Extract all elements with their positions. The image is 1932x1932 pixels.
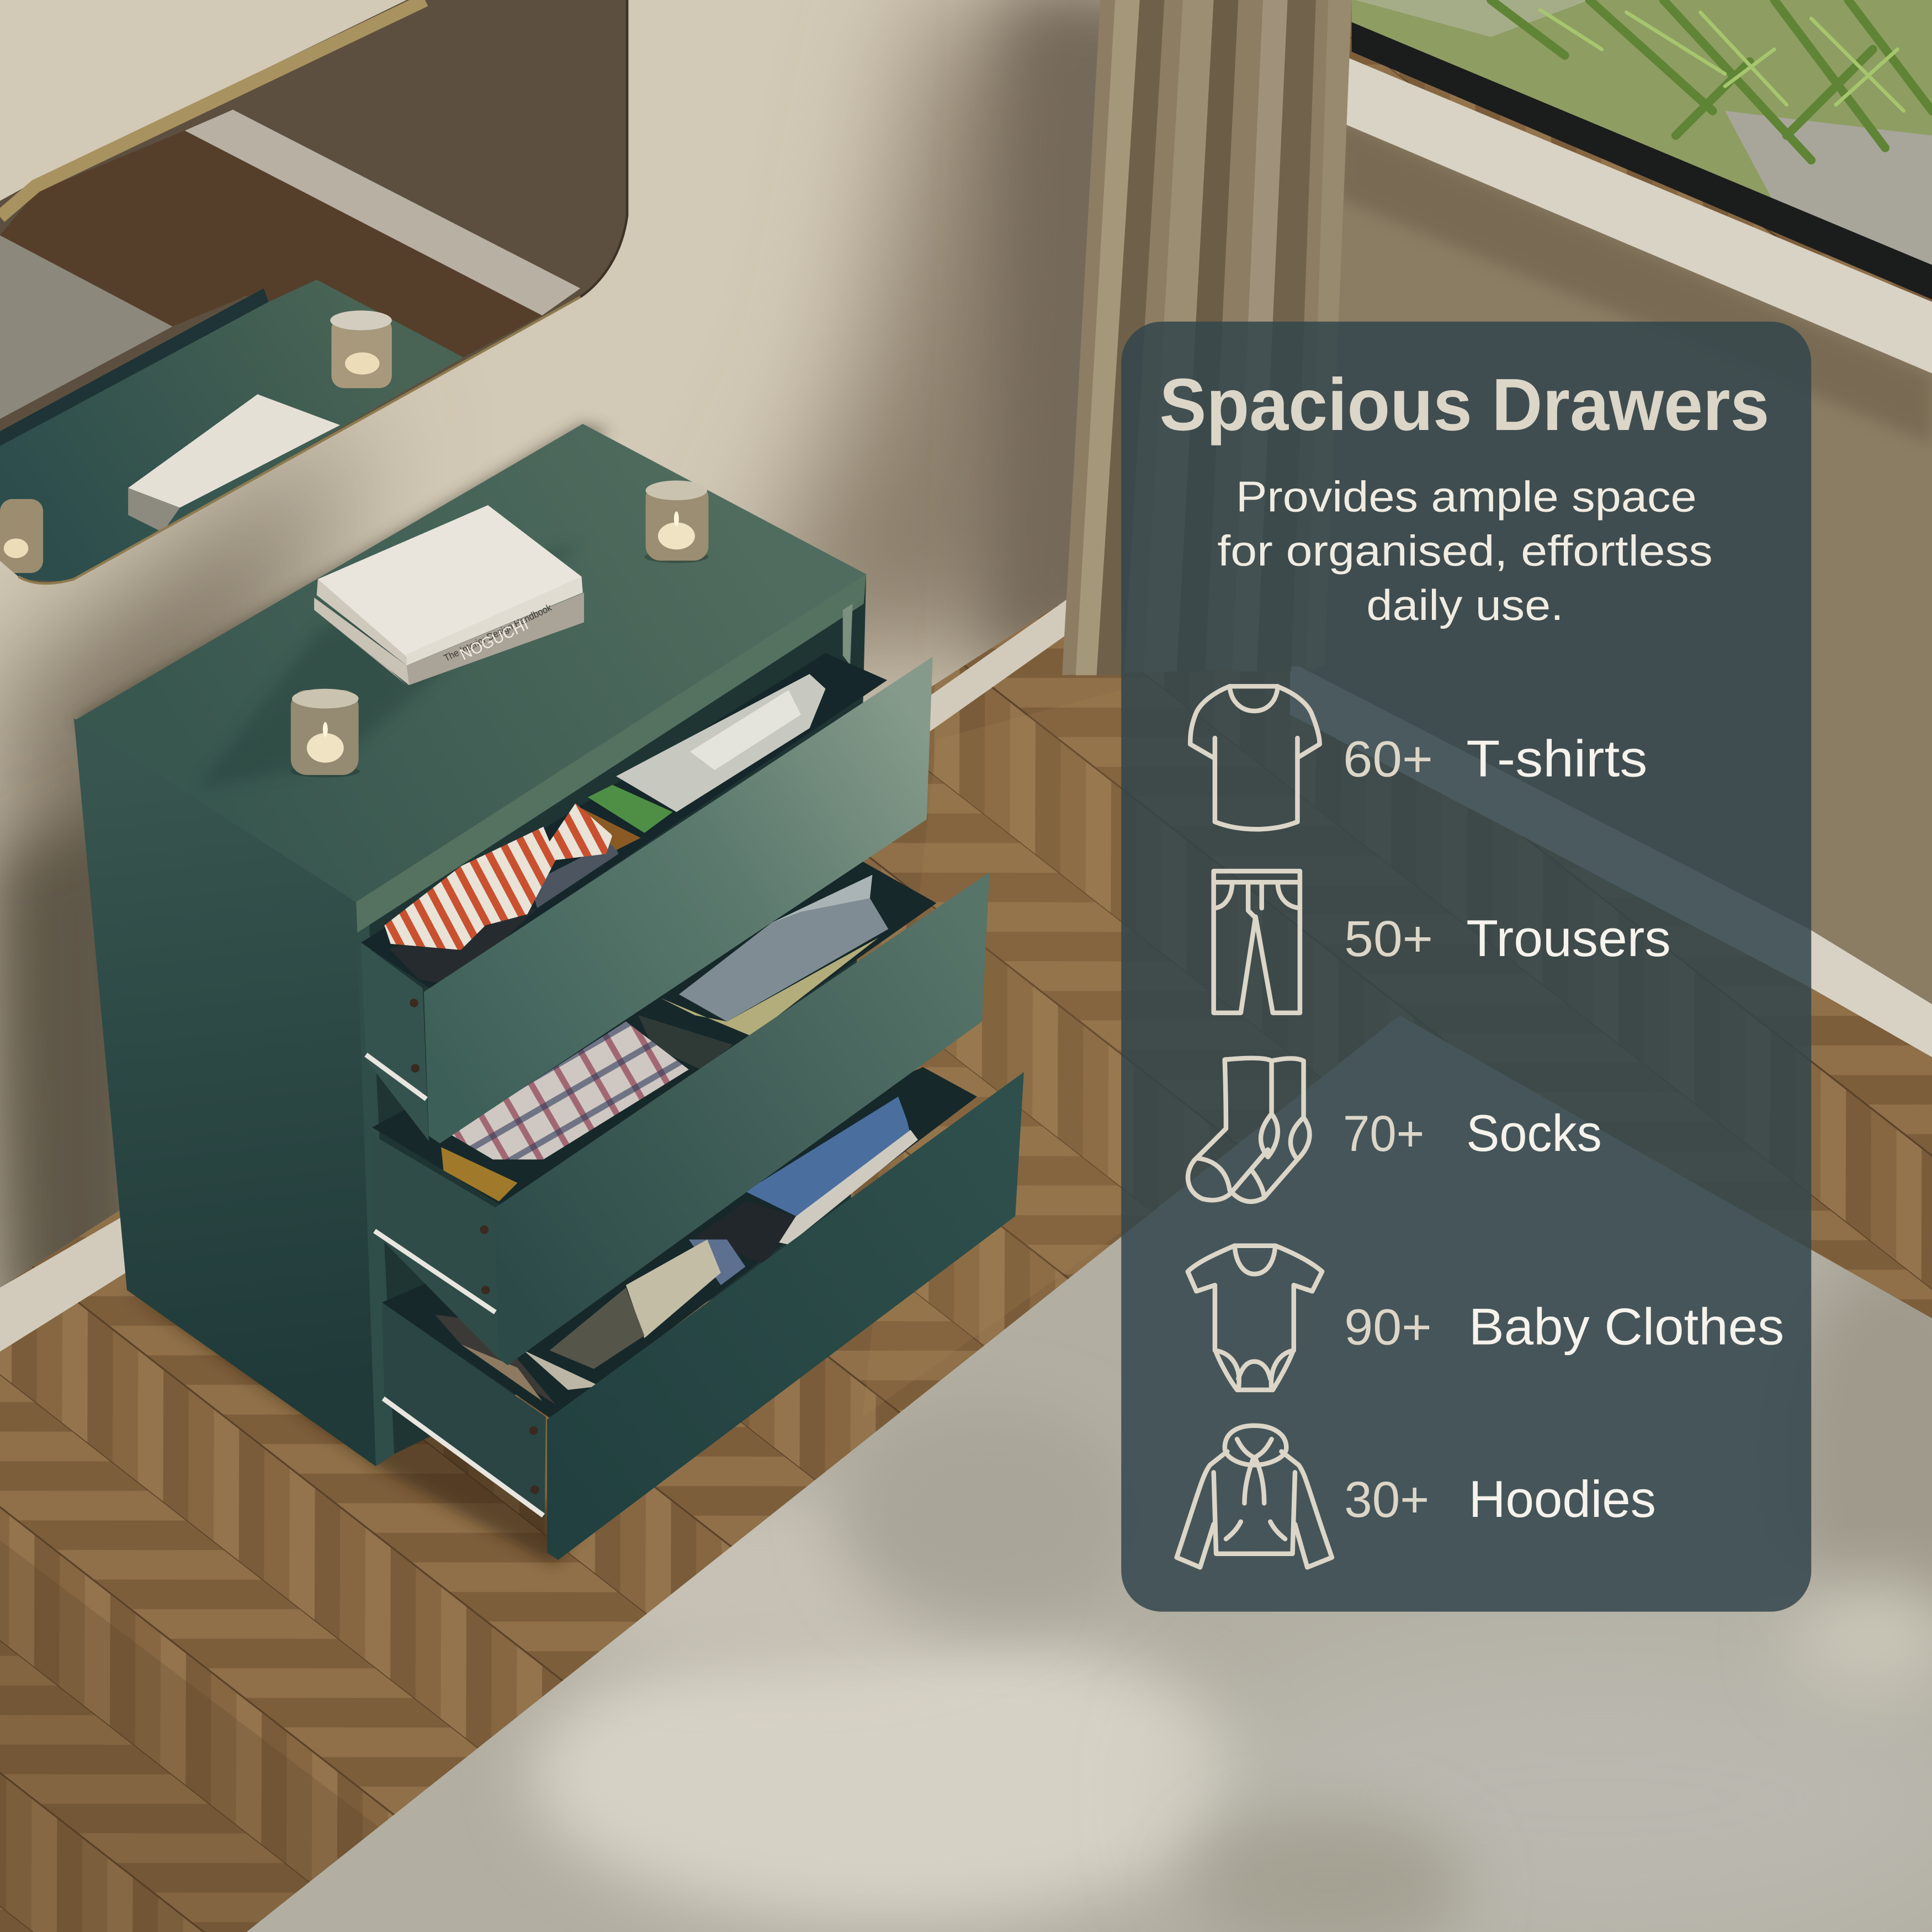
drawer 1 (361, 653, 933, 1143)
icon: hoodie (1177, 1426, 1332, 1567)
drawer 3: clothes (435, 1097, 918, 1405)
count: 60+: 60+ (1343, 731, 1433, 787)
wall: right side (1290, 121, 1932, 1004)
drawer 3: interior (382, 1067, 977, 1419)
panel description (1217, 472, 1713, 629)
dresser: side panel (74, 718, 376, 1466)
wall mirror (0, 0, 641, 591)
label: Baby Clothes: Baby Clothes (1469, 1297, 1784, 1355)
icon: baby bodysuit (1188, 1246, 1322, 1390)
drawer 3 (382, 1067, 1024, 1560)
mirror reflection: drawer edge (0, 288, 269, 446)
floor shadow under dresser (127, 1290, 579, 1565)
row: hoodies (1177, 1426, 1656, 1567)
dresser: front frame (356, 574, 866, 1466)
drawer 2: runner (375, 1231, 495, 1312)
count: 70+: 70+ (1343, 1106, 1424, 1162)
drawer 3: runner (383, 1398, 543, 1516)
drawer 1: front (424, 657, 933, 1143)
drawer 2: side with screws (372, 1135, 499, 1359)
skirting board: left wall (0, 598, 1072, 1352)
drawer 3: side with screws (382, 1302, 546, 1518)
icon: t-shirt (1190, 686, 1320, 829)
mirror reflection: second candle (0, 499, 43, 573)
drawer 1: side with screws (361, 943, 429, 1141)
count: 30+: 30+ (1344, 1472, 1429, 1528)
drawer 2: interior (372, 860, 936, 1208)
lower book (314, 593, 584, 685)
info panel (1121, 322, 1811, 1612)
drawer 2 (372, 860, 989, 1365)
candle: left (291, 689, 360, 777)
mirror reflection: dresser top (0, 280, 463, 582)
stacked books on dresser (314, 505, 584, 685)
dresser: front lip (356, 574, 866, 933)
panel description: for organised, effortless (1217, 527, 1713, 575)
mirror reflection: candle (330, 310, 392, 388)
rug (246, 1015, 1932, 1932)
row: baby clothes (1188, 1246, 1784, 1390)
panel description: Provides ample space (1236, 472, 1697, 521)
drawer 3: front (547, 1072, 1024, 1560)
candle: right (644, 481, 708, 563)
drawer 2: clothes (441, 875, 888, 1201)
dresser (74, 424, 1024, 1560)
book spine title: upper: The Interior Design Handbook (442, 602, 553, 664)
wall shadow cast by the dresser (74, 424, 610, 739)
window with ferns and gravel (1352, 0, 1932, 271)
skirting board: right wall (1290, 662, 1932, 1057)
panel description: daily use. (1366, 581, 1564, 629)
curtain (1062, 0, 1352, 675)
count: 90+: 90+ (1344, 1299, 1432, 1355)
panel background (1121, 322, 1811, 1612)
mirror reflection: book (128, 394, 340, 532)
mirror reflection: floor (0, 131, 542, 357)
upper book (318, 505, 582, 665)
drawer 1: clothes (384, 674, 826, 986)
row: trousers (1214, 871, 1671, 1013)
drawer 1: interior (361, 653, 887, 989)
mirror reflection: skirting (185, 110, 580, 315)
label: Trousers: Trousers (1466, 909, 1671, 967)
label: Hoodies: Hoodies (1469, 1470, 1656, 1528)
icon: socks (1188, 1058, 1309, 1202)
row: t-shirts (1190, 686, 1647, 829)
dresser: top cast shadow (197, 542, 579, 789)
label: Socks: Socks (1466, 1104, 1602, 1162)
drawer 1: runner (366, 1055, 426, 1099)
mirror frame: gold edge (0, 0, 627, 583)
dresser: top surface (74, 424, 866, 902)
wall: left plaster with light and shadow (0, 0, 1101, 1287)
drawer 2: front (495, 872, 989, 1365)
book spine title: lower: NOGUCHI (457, 615, 532, 664)
window frame (1352, 22, 1932, 299)
label: T-shirts: T-shirts (1466, 729, 1647, 787)
window sill (1337, 57, 1932, 373)
count: 50+: 50+ (1344, 911, 1433, 967)
row: socks (1188, 1058, 1602, 1202)
mirror reflection: rug (0, 235, 172, 419)
icon: trousers (1214, 871, 1300, 1013)
panel title: Spacious Drawers (1159, 364, 1769, 446)
